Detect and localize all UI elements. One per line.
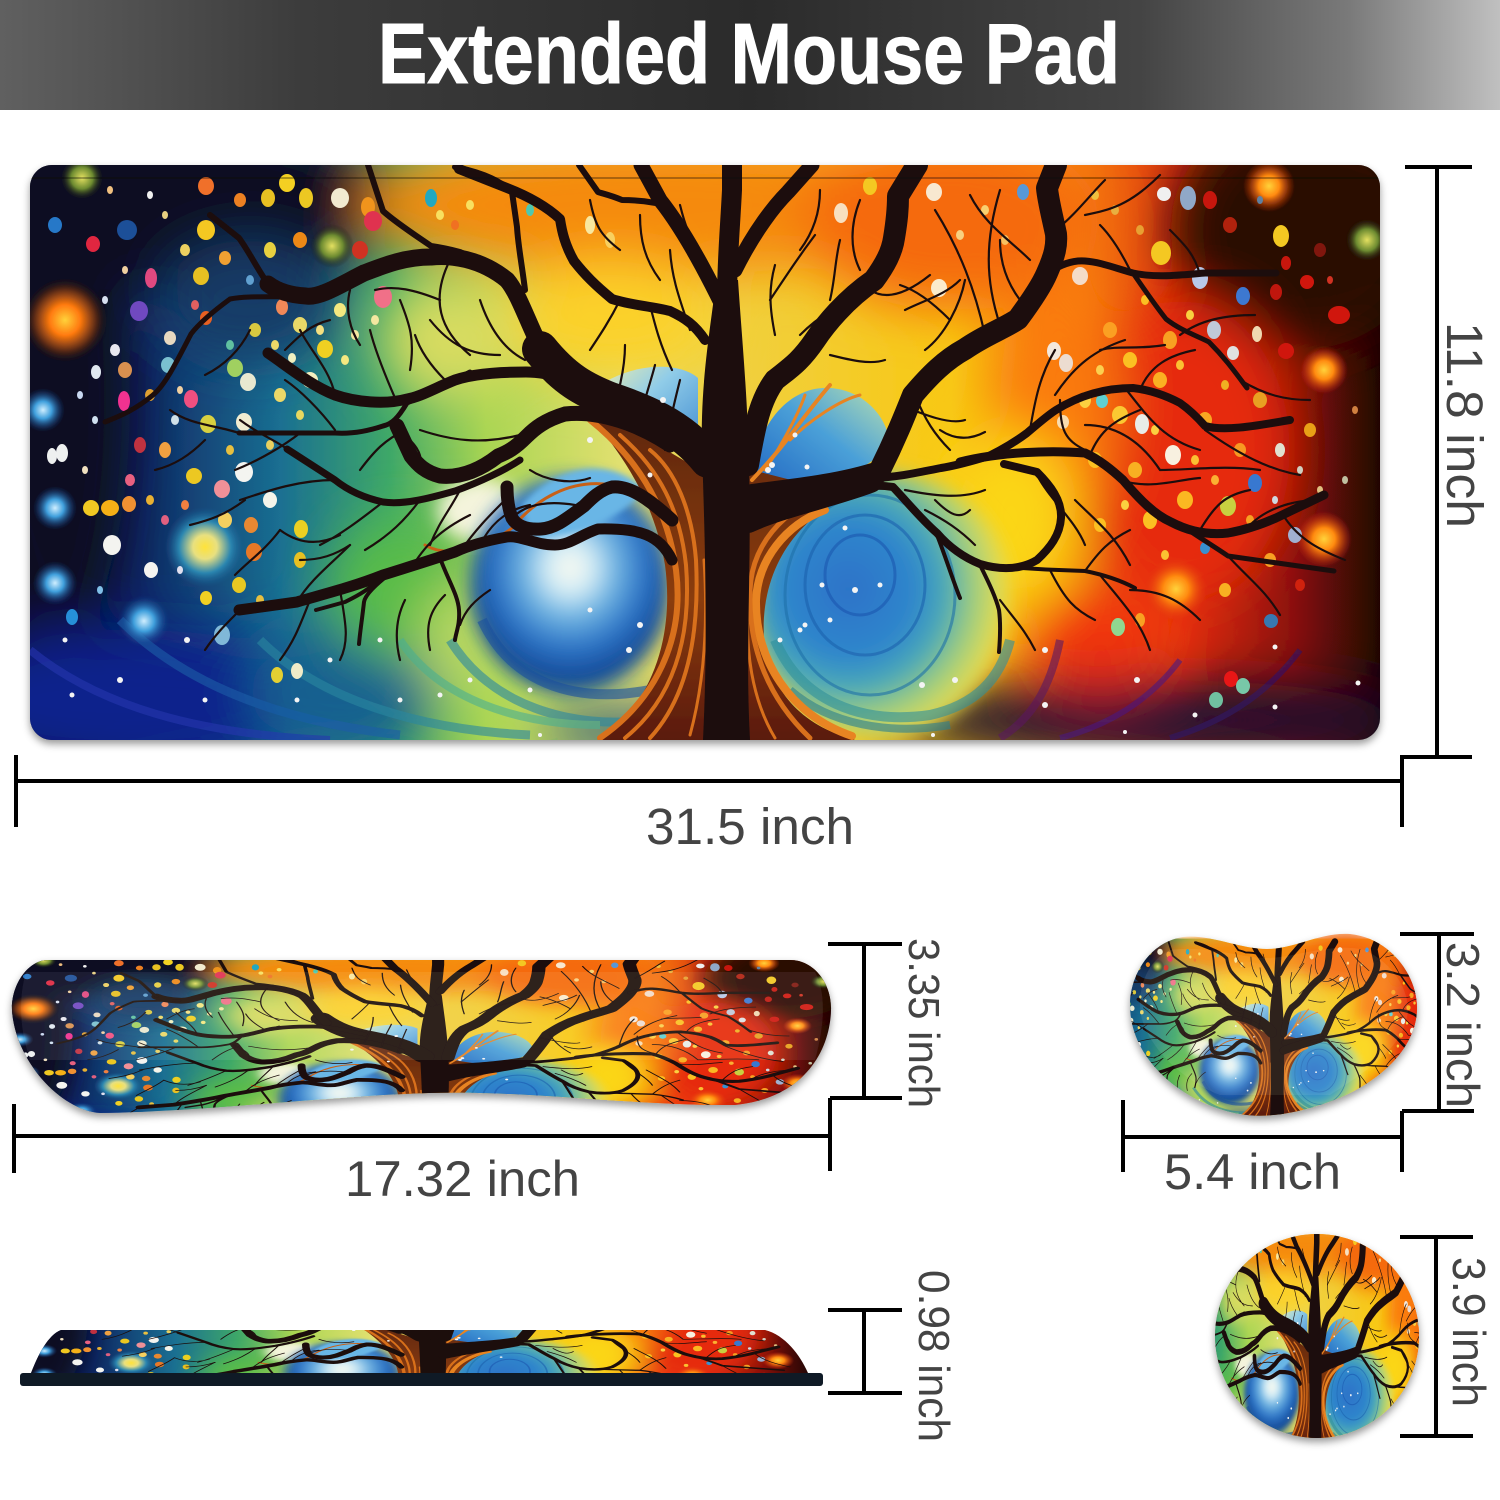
dimension: mouse pad height	[1402, 167, 1493, 757]
label: 31.5 inch: 31.5 inch	[646, 798, 854, 855]
dimension: wrist rest depth	[828, 938, 948, 1108]
label: 0.98 inch: 0.98 inch	[909, 1270, 958, 1442]
dimension: wrist rest thickness	[828, 1270, 958, 1442]
label: 3.9 inch: 3.9 inch	[1443, 1257, 1495, 1407]
dimension: mouse pad width	[16, 755, 1402, 855]
gel mouse rest	[1125, 934, 1422, 1125]
label: 5.4 inch: 5.4 inch	[1164, 1144, 1341, 1200]
mouse pad	[24, 164, 1386, 750]
title: Extended Mouse Pad	[378, 7, 1120, 102]
side view base	[20, 1373, 823, 1386]
dimension: gel rest depth	[1400, 934, 1489, 1111]
label: 3.35 inch: 3.35 inch	[899, 938, 948, 1108]
dimension: gel rest width	[1123, 1100, 1402, 1200]
dimension: wrist rest width	[14, 1098, 830, 1207]
label: 11.8 inch: 11.8 inch	[1436, 322, 1493, 528]
label: 3.2 inch: 3.2 inch	[1437, 942, 1489, 1108]
wrist rest	[6, 958, 836, 1122]
round coaster	[1210, 1233, 1424, 1447]
wrist rest side view	[20, 1330, 823, 1386]
label: 17.32 inch: 17.32 inch	[345, 1151, 580, 1207]
header bar	[0, 0, 1500, 110]
dimension: coaster diameter	[1400, 1237, 1495, 1436]
